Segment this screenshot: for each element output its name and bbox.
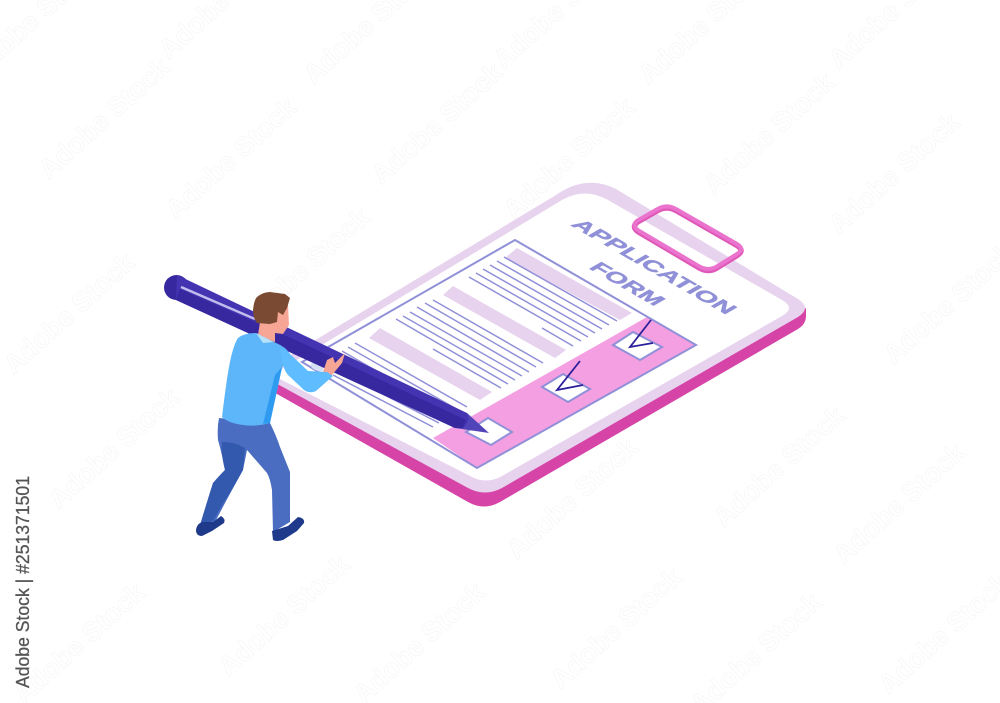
watermark pattern: Adobe Stock	[33, 51, 176, 185]
pen highlight	[181, 287, 255, 319]
form sheet background	[302, 240, 696, 468]
pen cap	[164, 275, 189, 300]
clipboard lilac frame	[259, 183, 805, 492]
clipboard pink edge	[270, 308, 806, 506]
watermark pattern: Adobe Stock	[823, 106, 966, 240]
watermark pattern: Adobe Stock	[828, 436, 971, 570]
pink answers band	[433, 317, 696, 468]
pen shadow side	[176, 289, 466, 428]
neck and face	[258, 302, 289, 342]
trousers shadow	[200, 442, 245, 525]
arm	[280, 349, 333, 392]
watermark pattern: Adobe Stock	[213, 548, 356, 682]
pen	[164, 275, 489, 433]
watermark pattern: Adobe Stock	[233, 201, 376, 335]
left shoe	[196, 516, 225, 536]
checkbox 3	[466, 418, 512, 445]
text lines	[333, 257, 617, 427]
form sheet	[302, 240, 696, 468]
title: application form	[566, 217, 741, 317]
checkbox 2	[542, 361, 590, 402]
watermark pattern: Adobe Stock	[545, 561, 688, 695]
watermark pattern: Adobe Stock	[160, 91, 303, 225]
collar	[256, 333, 274, 343]
shirt	[222, 333, 290, 426]
clipboard white face	[272, 194, 789, 480]
left corner patch	[309, 361, 325, 373]
shirt side shadow	[263, 367, 282, 424]
title: application form: FORM	[584, 260, 670, 309]
watermark pattern: Adobe Stock	[698, 66, 841, 200]
watermark pattern: Adobe Stock	[43, 381, 186, 515]
trousers	[200, 418, 290, 532]
stock id label: Adobe Stock | #251371501	[13, 476, 33, 688]
watermark pattern: Adobe Stock	[366, 56, 509, 190]
clipboard clip	[634, 206, 741, 270]
pen body	[176, 275, 468, 428]
watermark pattern: Adobe Stock	[498, 91, 641, 225]
lilac heading bars	[369, 248, 632, 400]
watermark pattern: Adobe Stock	[0, 246, 141, 380]
pen tip	[455, 413, 489, 433]
title: application form: APPLICATION	[566, 217, 741, 317]
clipboard	[259, 183, 806, 506]
man figure	[196, 292, 345, 541]
checkbox 1	[613, 320, 662, 360]
form sheet outline	[302, 240, 696, 468]
right shoe	[272, 517, 304, 541]
watermark pattern: Adobe Stock	[501, 431, 644, 565]
hair	[253, 292, 290, 324]
watermark pattern: Adobe Stock	[708, 399, 851, 533]
hand	[323, 353, 345, 378]
